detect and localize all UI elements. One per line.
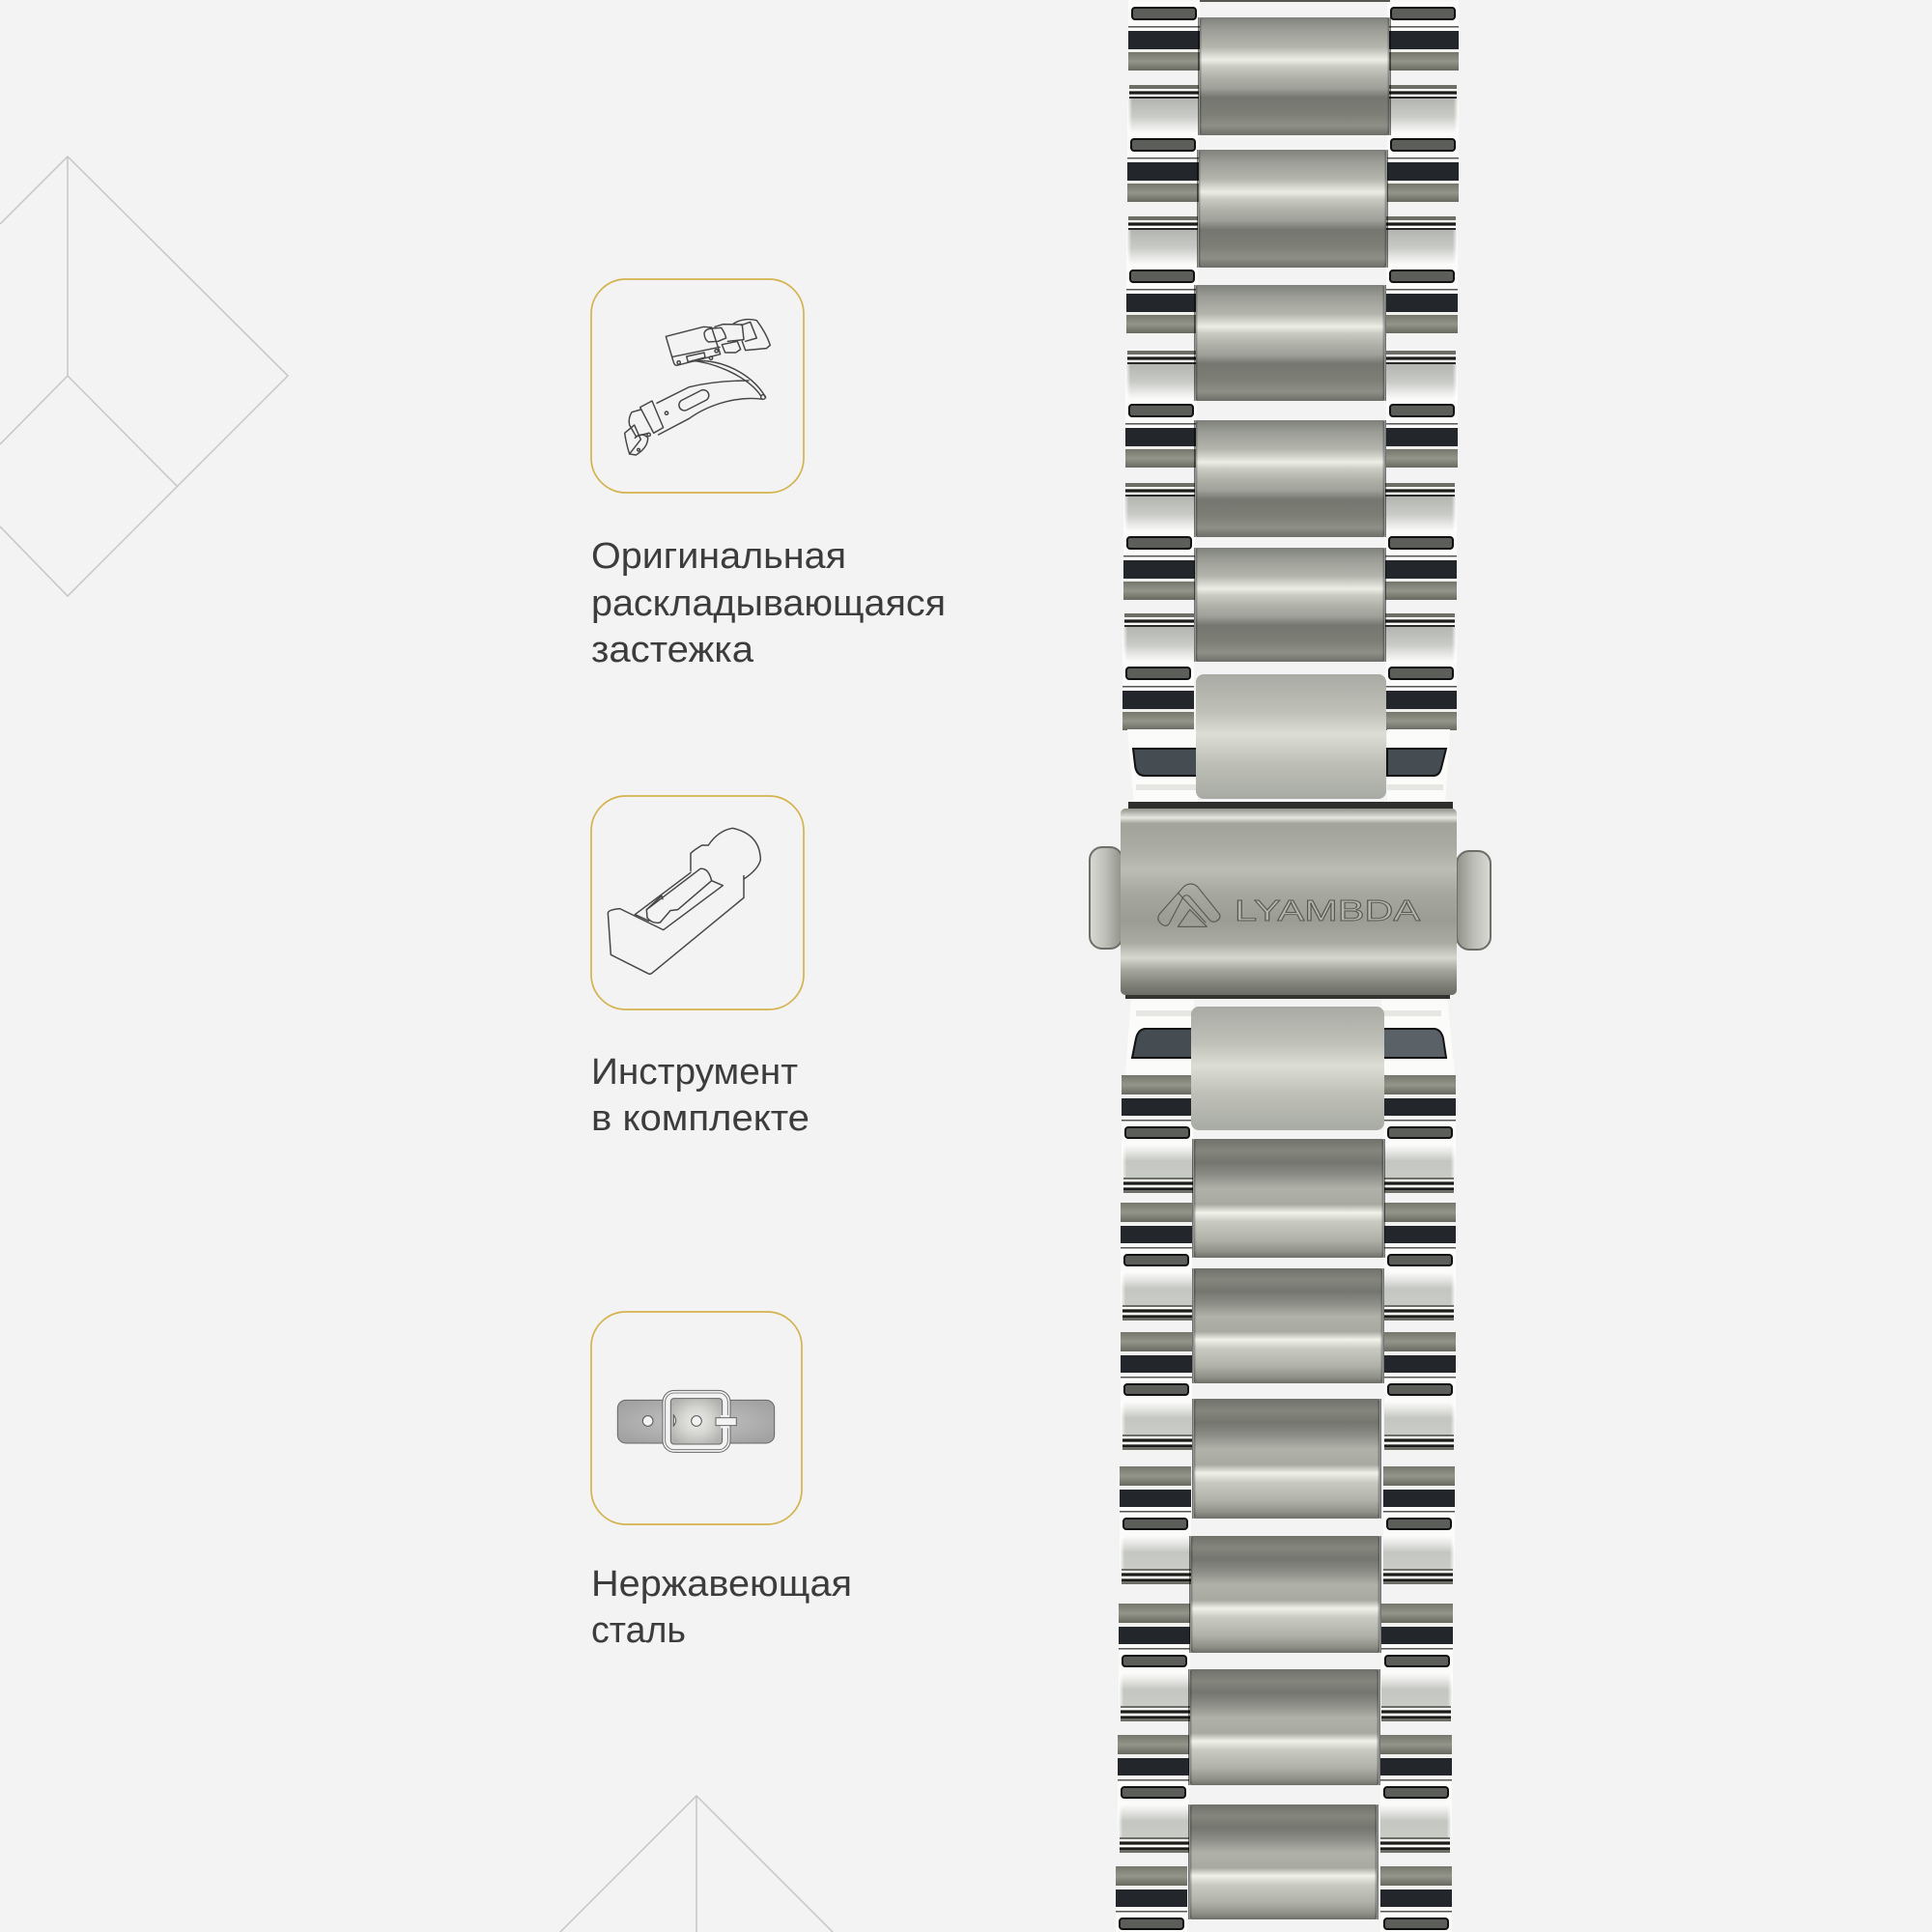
clasp buttons	[1090, 847, 1491, 950]
caption: steel: Нержавеющая	[591, 1564, 852, 1605]
upper side links, right	[1385, 0, 1459, 730]
centre links, lower strap	[1188, 1007, 1385, 1919]
caption: clasp	[591, 536, 946, 670]
LYAMBDA logo mark	[1158, 884, 1220, 926]
lower side links, left	[1116, 1075, 1193, 1932]
icon frame: clasp	[591, 279, 804, 493]
icon: steel belt buckle	[617, 1390, 775, 1452]
caption: tool	[591, 1052, 810, 1139]
icon: fold-over clasp	[625, 320, 770, 455]
decorative diamond outline, bottom	[560, 1796, 833, 1932]
caption: clasp: раскладывающаяся	[591, 583, 946, 624]
upper end piece	[1127, 729, 1450, 804]
caption: steel	[591, 1564, 852, 1651]
icon frame: tool	[591, 796, 804, 1009]
lower side links, right	[1380, 1075, 1456, 1932]
panel: stainless steel feature	[591, 1312, 852, 1651]
caption: steel: сталь	[591, 1610, 686, 1651]
decorative diamond outline, top left	[0, 156, 288, 596]
panel: clasp feature	[591, 279, 946, 670]
LYAMBDA logo wordmark: LYAMBDA	[1235, 894, 1420, 927]
icon: link removal tool	[608, 828, 760, 974]
steel bracelet	[1090, 0, 1491, 1932]
lower end piece	[1125, 995, 1455, 1075]
upper side links, left	[1122, 0, 1200, 730]
caption: tool: Инструмент	[591, 1052, 798, 1093]
caption: clasp: застежка	[591, 630, 754, 670]
centre links, upper strap	[1194, 0, 1391, 799]
clasp cover plate	[1121, 802, 1457, 999]
caption: tool: в комплекте	[591, 1098, 810, 1139]
caption: clasp: Оригинальная	[591, 536, 846, 577]
panel: tool feature	[591, 796, 810, 1139]
icon frame: steel	[591, 1312, 802, 1524]
